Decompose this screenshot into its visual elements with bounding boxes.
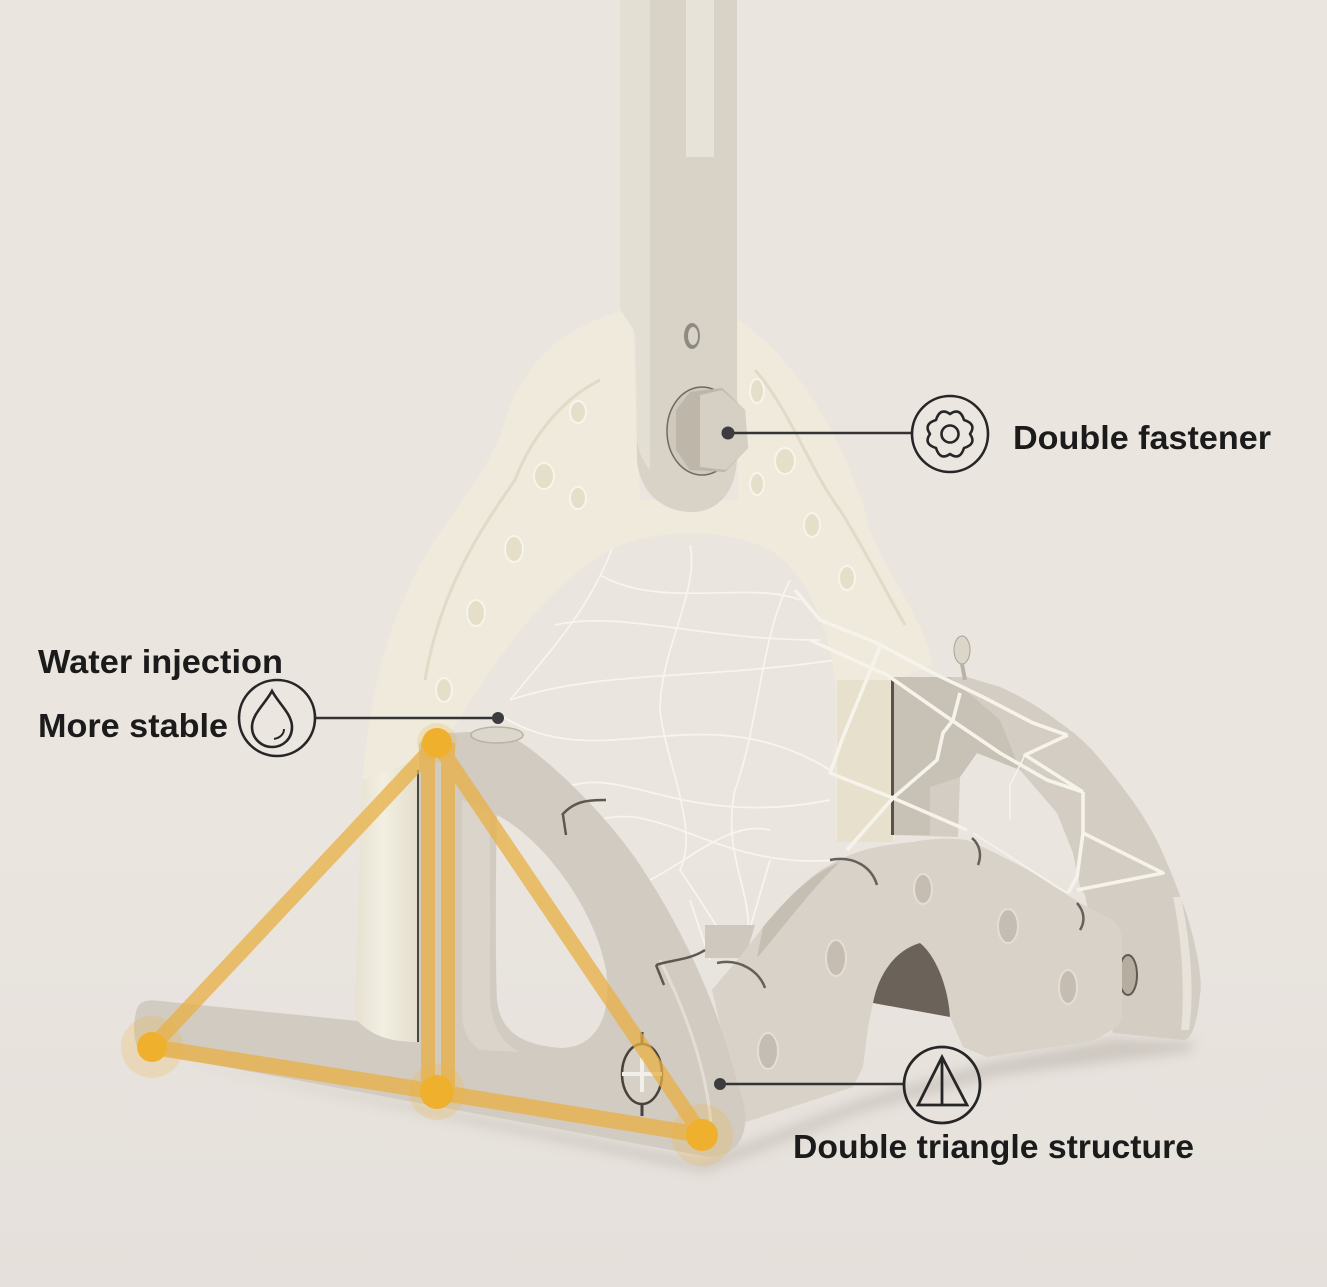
window column shade — [462, 800, 520, 1052]
holes — [758, 874, 1077, 1069]
arch body — [355, 308, 932, 1042]
screw — [684, 323, 700, 349]
label: Double triangle structure — [793, 1128, 1194, 1165]
label line 1: Water injection — [38, 643, 283, 680]
arc body — [893, 677, 1201, 1040]
foot body — [134, 730, 746, 1157]
hex bolt — [676, 388, 748, 472]
leader dot — [714, 1078, 726, 1090]
right inner column — [837, 680, 893, 842]
slot — [686, 0, 714, 157]
thin white net — [500, 540, 835, 960]
icon: triangle — [904, 1047, 980, 1123]
rivet bumps — [436, 379, 855, 702]
middle curved panel with holes — [712, 838, 1122, 1123]
left column — [355, 760, 417, 1042]
front left foot with goal arc — [134, 727, 746, 1157]
leader line — [728, 432, 912, 434]
leader line — [720, 1083, 904, 1085]
post — [620, 0, 737, 512]
yellow double triangle overlay — [121, 723, 733, 1166]
bolt — [1119, 955, 1137, 995]
floor shadows — [160, 1038, 1195, 1172]
washer — [667, 387, 737, 475]
clips — [717, 838, 1083, 988]
label: Double fastener — [1013, 419, 1271, 456]
back side arc of goal — [891, 677, 1201, 1040]
arch opening — [873, 943, 950, 1017]
net pin — [954, 636, 970, 680]
icon: water drop — [239, 680, 315, 756]
leader line — [315, 717, 498, 719]
leader dot — [492, 712, 504, 724]
top rim fold — [757, 862, 840, 958]
post highlight — [620, 0, 650, 470]
product: upright post with bolt — [620, 0, 748, 512]
thick net ropes — [795, 590, 1163, 893]
triangle struts — [152, 743, 702, 1135]
water cap — [471, 727, 523, 743]
screw — [622, 1044, 662, 1104]
panel — [712, 839, 1122, 1123]
halos — [121, 723, 733, 1166]
label line 2: More stable — [38, 707, 228, 744]
node dots — [137, 728, 718, 1151]
callout: water injection — [38, 643, 504, 756]
product: cream arch frame — [355, 308, 932, 1042]
arch inner raised rim — [425, 380, 600, 680]
darker panel — [893, 677, 1020, 835]
panel dark edge — [891, 680, 894, 835]
clips — [562, 800, 705, 985]
edge highlight — [1173, 897, 1192, 1030]
leader dot — [722, 426, 734, 440]
icon: gear — [912, 396, 988, 472]
callout: double fastener — [722, 396, 1271, 472]
gray bar behind panel — [705, 925, 755, 958]
callout: double triangle structure — [714, 1047, 1194, 1165]
column inner shadow — [417, 770, 419, 1042]
edge highlight — [660, 960, 712, 1140]
